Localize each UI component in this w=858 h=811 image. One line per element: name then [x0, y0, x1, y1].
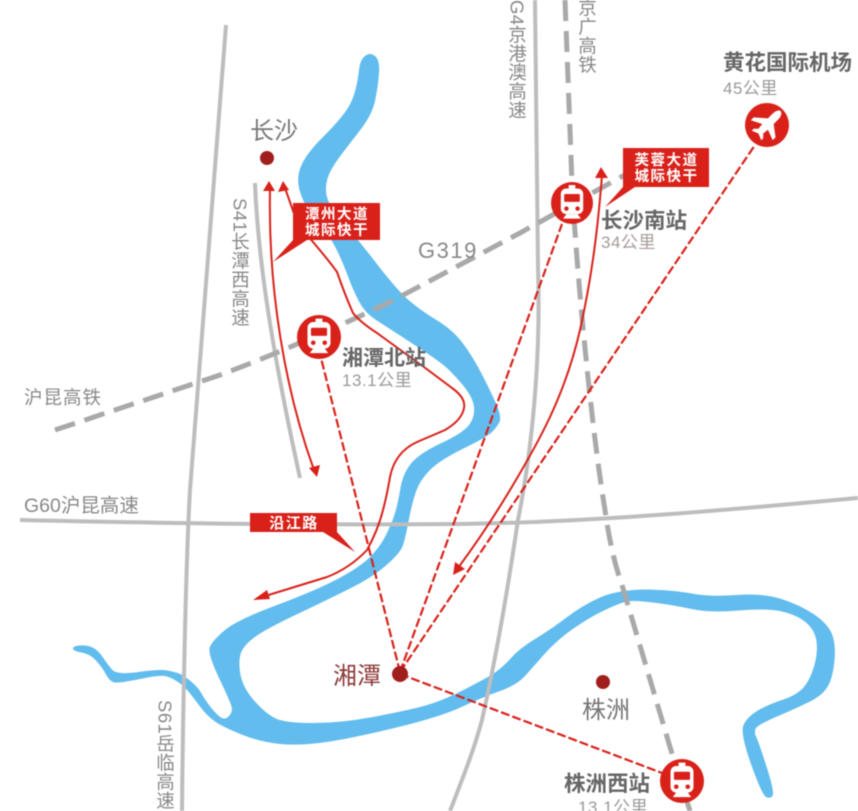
road: G60 expressway [20, 498, 858, 524]
label: Xiangtan North station [342, 347, 426, 390]
icon: Changsha South train station [551, 182, 593, 224]
label: Hukun high-speed rail: 沪昆高铁 [24, 387, 102, 408]
label: G60 expressway: G60沪昆高速 [24, 495, 139, 517]
label: Huanghua airport: 45公里 [723, 79, 778, 98]
label: Changsha South station: 34公里 [601, 233, 656, 252]
road: G4 expressway [450, 0, 539, 811]
label: Changsha South station [601, 209, 687, 252]
label: Xiangtan North station: 湘潭北站 [342, 347, 426, 370]
icon: airport plane [745, 103, 789, 147]
route: Tanzhou avenue [253, 181, 464, 600]
label: Changsha South station: 长沙南站 [601, 209, 687, 233]
label: Xiangtan: 湘潭 [333, 663, 381, 690]
callout: Yanjiang road [250, 513, 355, 552]
callout: Tanzhou avenue: 潭州大道 [305, 205, 369, 223]
callout: Yanjiang road: 沿江路 [269, 514, 319, 532]
label: G319: G319 [418, 238, 478, 263]
railway: Hukun high-speed rail [55, 172, 630, 430]
route: Furong avenue [453, 167, 608, 575]
label: S61 expressway: S61岳临高速 [154, 700, 176, 810]
city marker: Xiangtan [392, 666, 408, 682]
label: Zhuzhou West station [564, 772, 650, 811]
callout: Tanzhou avenue: 城际快干 [305, 221, 369, 239]
label: Jingguang high-speed rail: 京广高铁 [576, 0, 598, 74]
city marker: Zhuzhou [596, 675, 610, 689]
label: Zhuzhou West station: 株洲西站 [564, 772, 650, 796]
icon: Xiangtan North train station [297, 315, 341, 359]
route: Shuangxiang double arrow line [263, 181, 320, 477]
callout: Tanzhou avenue [273, 203, 380, 262]
callout: Furong avenue [605, 148, 709, 207]
route: dashed lines from Xiangtan [321, 145, 755, 773]
city marker: Changsha [260, 151, 274, 165]
label: S41 expressway: S41长潭西高速 [230, 198, 250, 327]
road: S61 expressway [182, 25, 226, 811]
label: G4 expressway: G4京港澳高速 [506, 0, 528, 119]
label: Xiangtan North station: 13.1公里 [342, 371, 412, 390]
railway: Jingguang high-speed rail [565, 0, 690, 811]
label: Changsha: 长沙 [250, 118, 298, 145]
icon: Zhuzhou West train station [660, 759, 704, 803]
label: Huanghua airport [723, 51, 852, 98]
road: S41 expressway [255, 183, 300, 478]
callout: Furong avenue: 城际快干 [634, 167, 698, 185]
callout: Furong avenue: 芙蓉大道 [634, 151, 698, 169]
label: Zhuzhou: 株洲 [582, 697, 630, 724]
label: Huanghua airport: 黄花国际机场 [723, 51, 852, 75]
